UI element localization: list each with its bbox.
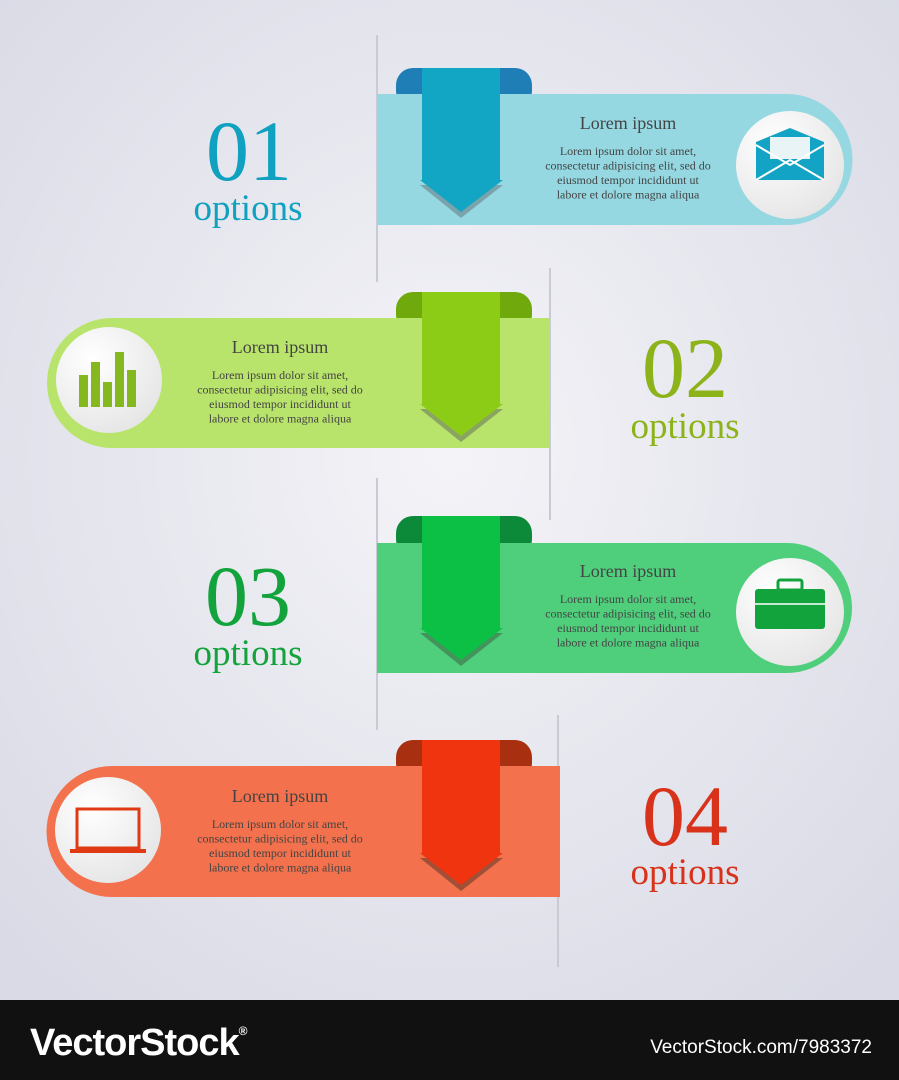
text 3: labore et dolore magna aliqua [557,636,700,650]
number 03: options [194,633,302,674]
text 3: Lorem ipsum dolor sit amet, [560,592,696,606]
footer bar: ® [239,1024,248,1038]
heading 4: Lorem ipsum [232,786,328,806]
text 1: consectetur adipisicing elit, sed do [545,158,711,172]
text 1: eiusmod tempor incididunt ut [557,173,699,187]
text 1: labore et dolore magna aliqua [557,188,700,202]
icon: laptop [55,777,161,883]
arrow 2 [396,292,532,442]
footer bar [0,1000,899,1080]
text 3: consectetur adipisicing elit, sed do [545,606,711,620]
text 2: eiusmod tempor incididunt ut [209,397,351,411]
number 02: options [631,406,739,447]
number 02 [631,320,739,447]
text 4: Lorem ipsum dolor sit amet, [212,817,348,831]
panel 4 [46,740,560,897]
arrow 3 [396,516,532,666]
panel 3 [377,516,852,673]
arrow 1 [396,68,532,218]
icon: briefcase [736,558,844,666]
panel 1 [377,68,852,225]
heading 1: Lorem ipsum [580,113,676,133]
text 2: consectetur adipisicing elit, sed do [197,382,363,396]
text 2: Lorem ipsum dolor sit amet, [212,368,348,382]
icon: bar chart [56,327,162,433]
text 1: Lorem ipsum dolor sit amet, [560,144,696,158]
icon: envelope [736,111,844,219]
number 04: options [631,852,739,893]
number 04: 04 [642,768,728,864]
number 01: options [194,188,302,229]
number 01 [194,103,302,229]
text 4: eiusmod tempor incididunt ut [209,846,351,860]
number 02: 02 [642,320,728,416]
panel 2 [47,292,550,448]
text 2: labore et dolore magna aliqua [209,412,352,426]
number 03 [194,548,302,674]
heading 3: Lorem ipsum [580,561,676,581]
number 03: 03 [205,548,291,644]
footer bar: VectorStock.com/7983372 [650,1037,872,1058]
number 04 [631,768,739,893]
text 4: labore et dolore magna aliqua [209,860,352,874]
footer bar: VectorStock [30,1022,239,1064]
text 4: consectetur adipisicing elit, sed do [197,832,363,846]
number 01: 01 [206,103,292,199]
heading 2: Lorem ipsum [232,337,328,357]
arrow 4 [396,740,532,891]
text 3: eiusmod tempor incididunt ut [557,621,699,635]
